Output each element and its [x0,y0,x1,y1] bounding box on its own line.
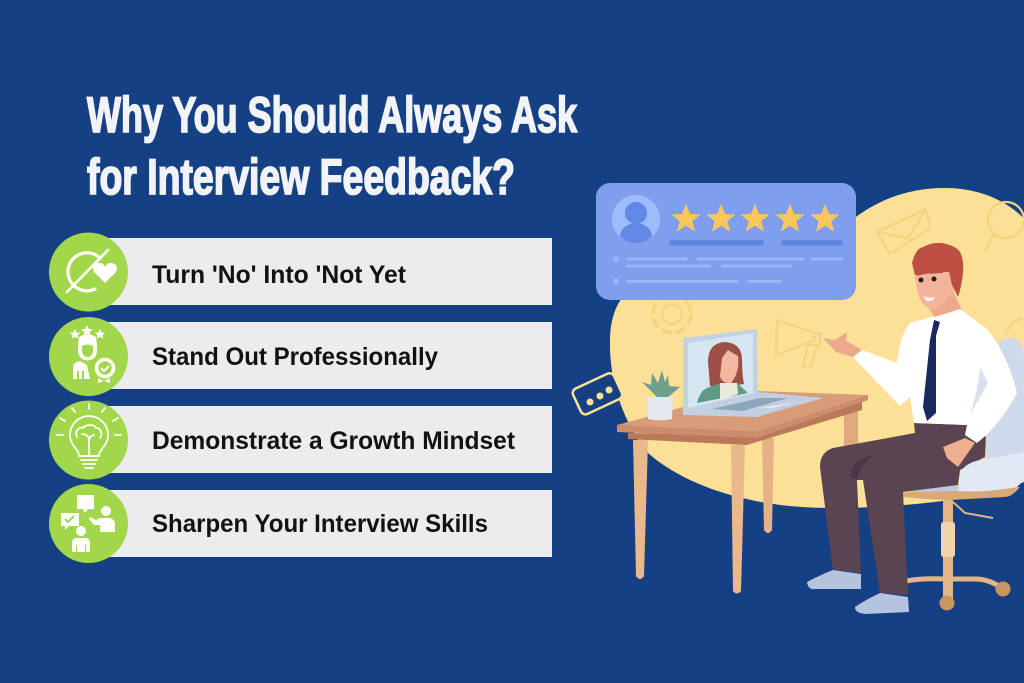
list item: Stand Out Professionally: Stand Out Professionally [152,343,438,371]
desk [617,391,868,594]
yellow background blob [610,188,1024,508]
trousers [820,423,986,595]
list item: Sharpen Your Interview Skills [49,484,552,563]
title [87,87,577,205]
neck [925,285,962,322]
shirt [853,309,1017,443]
shoes [807,570,861,589]
title: Why You Should Always Ask [87,87,577,143]
five stars [672,204,840,232]
faint background icons [653,202,1024,367]
icon: crossed-out circle with heart [67,250,117,292]
chair base and back [903,338,1024,610]
shirt shadow [970,367,988,415]
eyes and brows [917,272,943,282]
list item: Turn No Into Not Yet: Turn 'No' Into 'Not Yet [152,261,407,289]
necktie [923,320,940,421]
raised hand [823,332,862,357]
title: for Interview Feedback? [87,149,515,205]
review card [596,183,856,300]
icon: interview discussion [61,495,115,552]
trouser fold [851,438,915,478]
icon: professional with stars and badge [70,325,114,383]
laptop with video call [683,329,823,417]
list item: Demonstrate a Growth Mindset [49,400,552,480]
hand on knee [943,438,975,467]
hair [912,243,963,297]
list item: Turn No Into Not Yet [49,232,552,312]
chair cushion [958,452,1024,492]
list item: Sharpen Your Interview Skills: Sharpen Your Interview Skills [152,510,488,538]
illustration: interview feedback scene [571,183,1024,614]
face [914,262,956,310]
icon: light bulb with brain [57,404,121,468]
plant in pot [642,370,680,420]
smile [923,296,935,301]
chat bubble [571,372,624,416]
list item: Demonstrate a Growth Mindset: Demonstrate a Growth Mindset [152,427,516,455]
list item: Stand Out Professionally [49,317,552,396]
man sitting [807,243,1017,614]
